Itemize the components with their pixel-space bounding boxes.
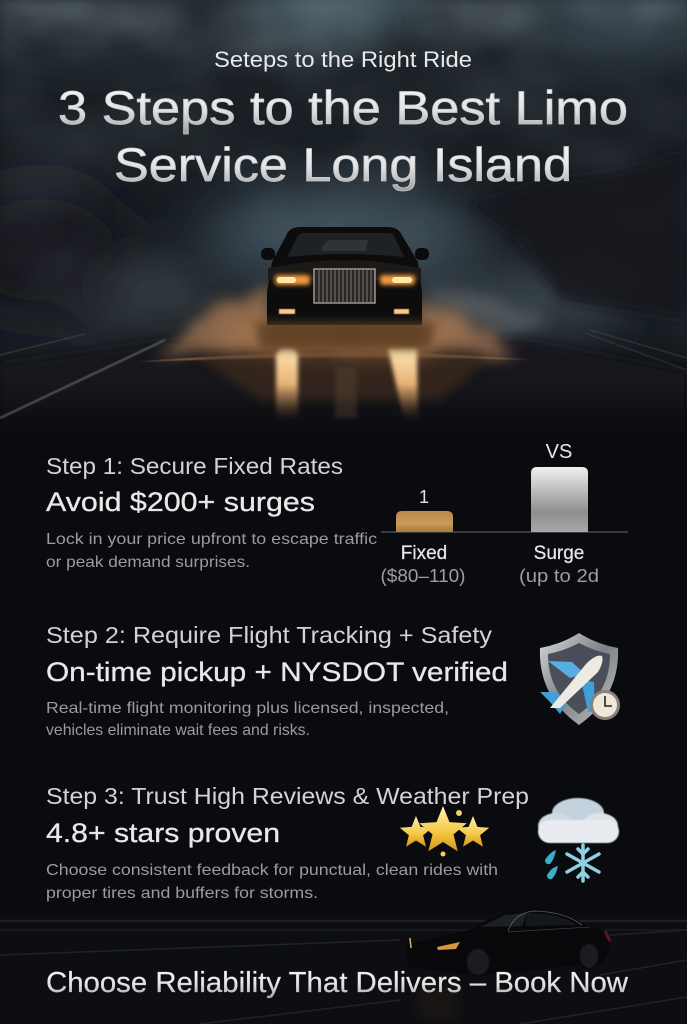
icon: shield with plane and clock <box>540 633 620 725</box>
distant hill <box>470 152 687 320</box>
grille <box>314 269 375 303</box>
step 3 heading: Step 3: Trust High Reviews & Weather Prep <box>46 783 529 809</box>
bar chart: fixed vs surge: ($80–110) <box>380 566 466 586</box>
side mirrors <box>261 248 275 260</box>
title: Service Long Island <box>114 138 572 191</box>
bar: fixed <box>396 511 453 532</box>
headlights <box>275 275 310 285</box>
step 2 heading: Step 2: Require Flight Tracking + Safety <box>46 622 493 648</box>
step 3 description: proper tires and buffers for storms. <box>46 885 318 902</box>
orange mist and headlight glow <box>135 282 560 420</box>
bar: surge <box>531 467 588 532</box>
subtitle: Seteps to the Right Ride <box>214 47 472 72</box>
icon: three gold stars <box>400 806 489 856</box>
icon: limousine front view <box>255 227 435 350</box>
bar chart: fixed vs surge: (up to 2d <box>519 566 599 586</box>
panel: step 3 reviews and weather <box>46 783 529 902</box>
bar chart: fixed vs surge: Fixed <box>401 543 447 564</box>
title: 3 Steps to the Best Limo <box>58 81 628 134</box>
bar chart: fixed vs surge <box>380 441 628 586</box>
panel: step 1 fixed rates <box>46 453 377 571</box>
footer: road scene with sedan <box>0 910 687 1024</box>
bar chart: fixed vs surge: Surge <box>534 543 584 564</box>
cloud texture <box>0 0 686 306</box>
bar chart: fixed vs surge: VS <box>546 441 572 463</box>
bar chart: fixed vs surge: 1 <box>419 487 429 507</box>
step 1 description: Lock in your price upfront to escape traffic <box>46 531 377 548</box>
step 1 description: or peak demand surprises. <box>46 554 250 571</box>
step 3 subheading: 4.8+ stars proven <box>46 818 280 848</box>
road markings <box>0 340 165 418</box>
step 2 subheading: On-time pickup + NYSDOT verified <box>46 657 508 687</box>
background: stormy sky and road <box>0 0 687 420</box>
step 2 description: Real-time flight monitoring plus licensed, inspected, <box>46 700 449 717</box>
step 3 description: Choose consistent feedback for punctual, clean rides with <box>46 862 498 879</box>
call to action: Choose Reliability That Delivers – Book Now <box>46 967 629 999</box>
road reflections <box>135 352 530 362</box>
step 1 subheading: Avoid $200+ surges <box>46 487 315 517</box>
panel: step 2 flight tracking <box>46 622 508 739</box>
step 2 description: vehicles eliminate wait fees and risks. <box>46 722 310 739</box>
title <box>58 81 628 191</box>
icon: black sedan <box>406 910 611 976</box>
step 1 heading: Step 1: Secure Fixed Rates <box>46 453 343 479</box>
icon: cloud with snowflake and rain <box>538 798 619 881</box>
road surface <box>0 340 687 450</box>
